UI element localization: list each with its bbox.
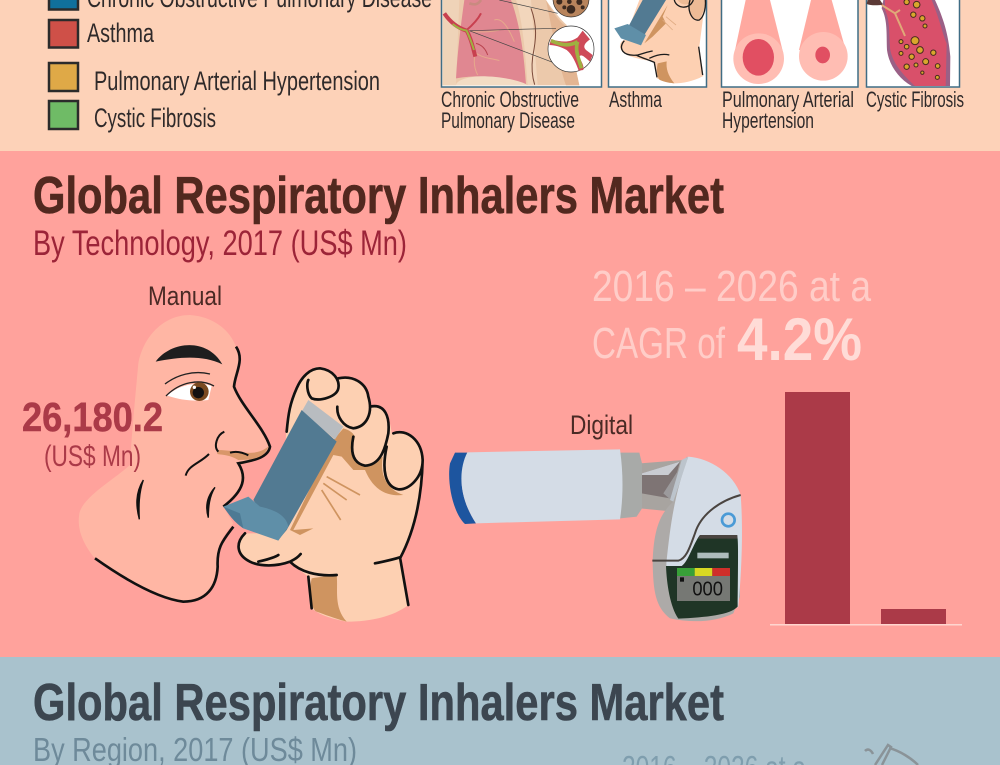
icon: region illustration — [865, 745, 918, 765]
face — [79, 315, 270, 602]
legend item: pulmonary arterial hypertension — [49, 63, 380, 96]
panel: pulmonary arterial hypertension thumbnail — [722, 0, 858, 133]
illustration: digital inhaler — [449, 449, 742, 621]
label: manual: Manual — [148, 281, 222, 311]
heading: technology title: Global Respiratory Inhalers Market — [33, 167, 724, 225]
hand and inhaler — [223, 367, 423, 622]
callout: CAGR technology — [592, 262, 871, 373]
callout: CAGR technology: CAGR of — [592, 319, 726, 368]
panel: asthma thumbnail — [608, 0, 706, 112]
panel: disease legend — [49, 0, 432, 133]
panel: COPD thumbnail: Chronic Obstructive — [441, 87, 579, 112]
legend item: pulmonary arterial hypertension: Pulmonary Arterial Hypertension — [94, 66, 380, 96]
callout: CAGR technology: 4.2% — [737, 306, 862, 373]
panel: pulmonary arterial hypertension thumbnail: Pulmonary Arterial — [722, 87, 854, 112]
panel: asthma thumbnail: Asthma — [609, 87, 663, 112]
panel: COPD thumbnail: Pulmonary Disease — [441, 108, 575, 133]
legend item: asthma — [49, 18, 155, 48]
illustration: person using manual inhaler — [79, 315, 423, 622]
value: manual market size: 26,180.2 — [22, 394, 163, 440]
label: digital: Digital — [570, 410, 633, 440]
value: manual market size: (US$ Mn) — [44, 440, 141, 473]
legend item: asthma: Asthma — [87, 18, 155, 48]
panel: COPD thumbnail — [441, 0, 602, 133]
illustration: digital inhaler: 000 — [692, 578, 723, 601]
callout: CAGR technology: 2016 – 2026 at a — [592, 262, 871, 311]
value: manual market size — [22, 394, 163, 473]
panel: pulmonary arterial hypertension thumbnail: Hypertension — [722, 108, 814, 133]
legend item: COPD — [49, 0, 432, 13]
legend item: cystic fibrosis: Cystic Fibrosis — [94, 103, 216, 133]
legend item: cystic fibrosis — [49, 101, 216, 133]
heading: region title: Global Respiratory Inhalers Market — [33, 674, 724, 732]
panel: cystic fibrosis thumbnail — [866, 0, 964, 112]
subheading: by technology: By Technology, 2017 (US$ Mn) — [33, 224, 407, 263]
chart: market by technology bars — [770, 392, 962, 626]
